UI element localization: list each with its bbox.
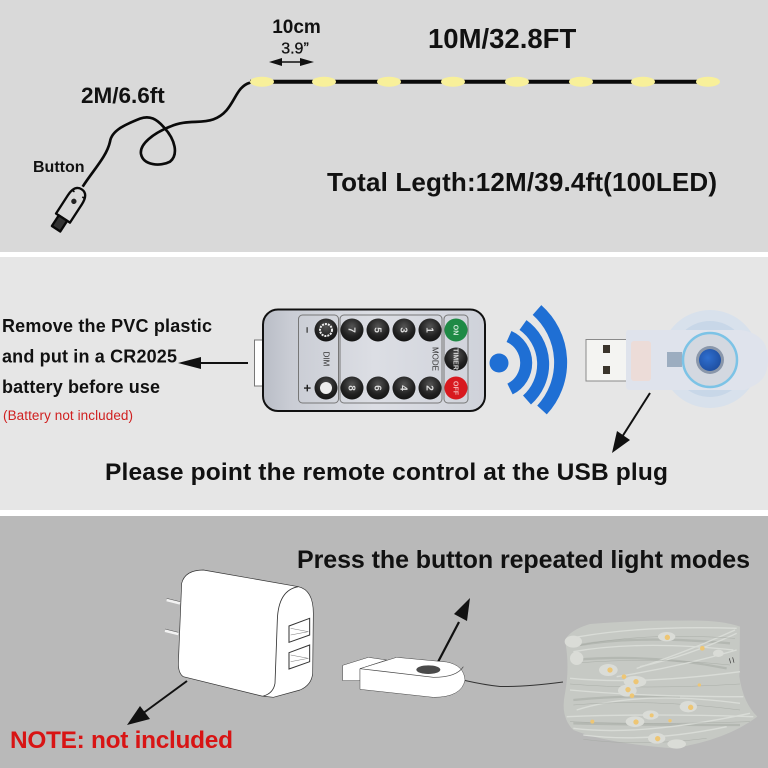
label: 10M length: 10M/32.8FT <box>428 23 576 54</box>
battery tab <box>254 340 264 386</box>
remote control: 8 <box>346 385 356 391</box>
remote control: 7 <box>346 327 356 333</box>
battery instructions text: (Battery not included) <box>3 408 133 423</box>
cable between dongle and coil <box>465 680 563 687</box>
label: button: Button <box>33 159 85 176</box>
remote control: MODE <box>430 347 440 371</box>
arrow: to battery tab <box>178 357 248 369</box>
remote control: OFF <box>452 381 458 396</box>
remote control: 5 <box>372 327 382 333</box>
arrow: to USB plug <box>612 393 650 453</box>
wall adapter <box>165 570 313 697</box>
note: not included: NOTE: not included <box>10 727 233 754</box>
caption: point the remote: Please point the remote control at the USB plug <box>105 459 668 486</box>
remote control: 3 <box>398 327 408 333</box>
remote control: DIM <box>322 352 330 367</box>
remote control: 6 <box>372 385 382 391</box>
panel: remote control <box>0 257 768 510</box>
remote control: ON <box>452 325 458 335</box>
heading: press the button: Press the button repeated light modes <box>297 546 750 574</box>
battery instructions text <box>2 316 212 423</box>
battery instructions text: and put in a CR2025 <box>2 346 177 366</box>
remote control <box>254 310 485 411</box>
panel: length specification <box>0 0 768 252</box>
arrow: adapter note <box>127 681 187 725</box>
USB dongle drawing <box>343 657 465 697</box>
remote control: 4 <box>398 385 408 391</box>
label: 2M lead length: 2M/6.6ft <box>81 83 165 108</box>
remote control: 1 <box>424 327 434 333</box>
battery instructions text: Remove the PVC plastic <box>2 316 212 336</box>
LED strip <box>250 77 720 87</box>
arrow: to button <box>438 598 470 662</box>
remote control: + <box>300 384 315 392</box>
coiled LED string lights <box>564 620 757 749</box>
label: 10cm spacing: 10cm <box>272 17 321 38</box>
arrow: LED spacing <box>269 58 314 66</box>
label: total length: Total Legth:12M/39.4ft(100LED) <box>327 167 717 197</box>
remote control: 2 <box>424 385 434 391</box>
label: 3.9 inch spacing: 3.9” <box>281 40 309 58</box>
remote control: TIMER <box>452 348 458 370</box>
USB plug receiver <box>586 310 768 408</box>
remote control: − <box>300 327 312 333</box>
battery instructions text: battery before use <box>2 377 160 397</box>
lead cable with USB plug <box>49 83 250 233</box>
icon: wireless signal <box>490 310 561 410</box>
panel: press button and accessories <box>0 516 768 768</box>
